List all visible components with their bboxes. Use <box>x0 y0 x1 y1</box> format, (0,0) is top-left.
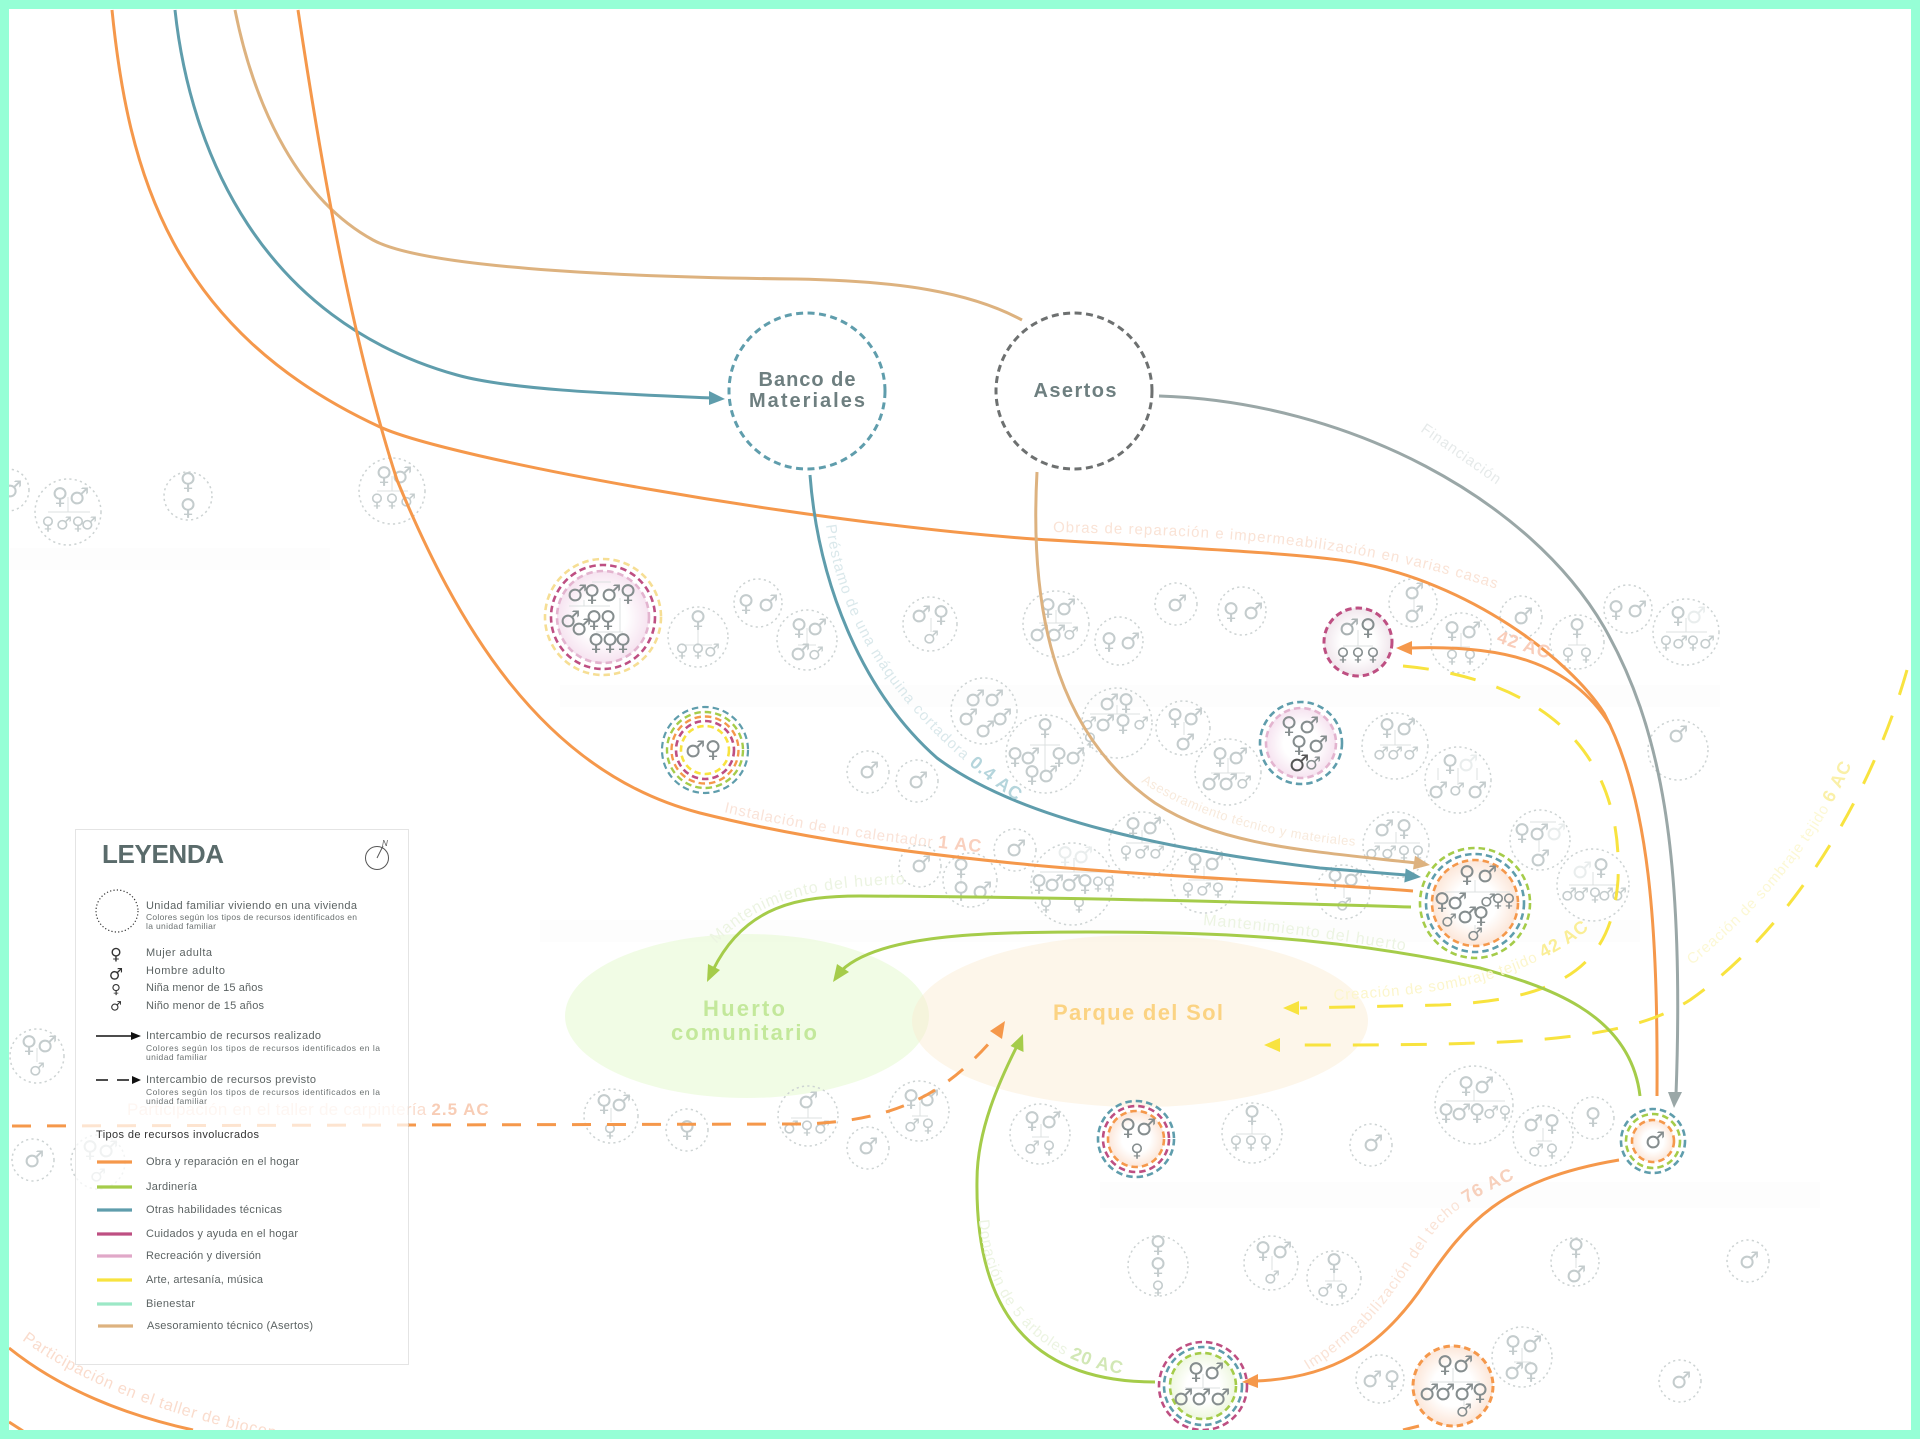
legend: realized exchange: unidad familiar <box>146 1052 207 1062</box>
legend: planned exchange: Intercambio de recursos previsto <box>146 1074 316 1086</box>
flow: taller de carpintería <box>12 1021 1005 1126</box>
label: Creación 42 AC: Creación de sombraje tejido 42 AC <box>1334 921 1587 1000</box>
flow: Mantenimiento del huerto 1 <box>707 896 1411 982</box>
family: ♀♂♂♀ <box>1031 871 1093 897</box>
legend: Asesoramiento: Asesoramiento técnico (Asertos) <box>147 1320 313 1332</box>
highlighted family: orange: ♂♂♂♀ <box>1419 1380 1488 1406</box>
highlighted family: multiple resources <box>662 707 748 793</box>
node: Asertos: Asertos <box>1034 380 1116 402</box>
family: ♂♀ <box>911 602 949 628</box>
family <box>1222 1102 1282 1163</box>
family <box>666 1109 708 1151</box>
family: ♂♀ <box>1099 690 1134 716</box>
family: ♂ <box>1449 780 1465 800</box>
label: Donación: Donación de 5 árboles 20 AC <box>979 1220 1122 1374</box>
highlighted family: pink and teal: ♂ <box>1305 754 1321 774</box>
family: ♀♂ <box>1101 629 1140 655</box>
family: ♀♀ <box>1091 874 1116 894</box>
highlighted family: orange <box>1413 1346 1493 1426</box>
family: ♀♀ <box>1445 646 1477 668</box>
highlighted family: pink and teal: ♀♂ <box>1281 713 1319 739</box>
legend: people <box>109 944 264 1014</box>
highlighted family: arts and care <box>545 559 661 675</box>
family <box>1500 596 1542 638</box>
family: ♂♀♂ <box>783 1118 830 1138</box>
family: ♂ <box>911 852 931 878</box>
family: ♂♂ <box>1201 770 1238 796</box>
family: ♀♂ <box>1444 618 1481 644</box>
family: ♀ <box>1442 751 1458 777</box>
family <box>164 469 212 521</box>
family: ♂♂♂ <box>1373 744 1419 764</box>
family: ♀♂ <box>1327 866 1363 892</box>
family: ♂♂♀♂♂ <box>1561 884 1627 906</box>
legend: people: ♂ <box>109 964 123 984</box>
family: ♂ <box>908 768 928 794</box>
label: Instalación: Instalación de un calentador 1 AC <box>725 802 981 852</box>
family: ♂ <box>29 1060 45 1080</box>
icon: compass <box>366 839 388 870</box>
label: Creación 6 AC: Creación de sombraje tejido 6 AC <box>1688 762 1850 963</box>
highlighted family: magenta: ♂ <box>1339 615 1359 641</box>
family <box>1557 849 1629 921</box>
family: ♂ <box>1404 602 1424 628</box>
family: ♀♂ <box>1024 762 1058 788</box>
legend: realized exchange <box>96 1030 380 1062</box>
family: ♂ <box>790 640 810 666</box>
highlighted family: teal magenta orange: ♀ <box>1130 1140 1144 1162</box>
family <box>1316 865 1370 919</box>
legend title: LEYENDA <box>102 839 224 869</box>
family: ♀ <box>603 1120 617 1142</box>
family: ♂ <box>1566 1262 1586 1288</box>
flow: Creación de sombraje tejido 6 AC <box>1264 670 1907 1052</box>
family <box>1356 1355 1404 1403</box>
family <box>1363 812 1429 878</box>
family: ♀♂ <box>82 1137 118 1163</box>
family: ♀♂♀♂ <box>1659 632 1715 654</box>
family: ♂ <box>1404 579 1424 605</box>
family: ♀♂ <box>1125 814 1162 840</box>
family: ♂ <box>1530 846 1550 872</box>
legend: planned exchange <box>96 1074 380 1106</box>
highlighted family: arts and care: ♀♀♀ <box>588 630 631 656</box>
family <box>1362 713 1428 779</box>
highlighted family: orange teal green <box>1420 848 1530 958</box>
family: ♂ <box>90 1166 106 1186</box>
family: ♀♀♂ <box>675 640 720 662</box>
area: Parque del Sol <box>912 935 1368 1107</box>
family <box>1171 847 1237 913</box>
label: Huerto comunitario: Huerto <box>703 996 785 1021</box>
family <box>71 1135 125 1189</box>
family <box>1350 1124 1392 1166</box>
label: Mantenimiento 1: Mantenimiento del huerto <box>710 874 904 936</box>
family <box>1156 701 1210 756</box>
family <box>1648 720 1708 780</box>
family: ♀ <box>1670 603 1686 629</box>
family: ♀♂ <box>596 1091 631 1117</box>
family <box>1095 617 1143 665</box>
family <box>1307 1250 1361 1305</box>
family: ♀ <box>690 607 706 633</box>
family: ♂♂ <box>965 686 1004 712</box>
family: ♂ <box>1081 714 1097 734</box>
label: Asesoramiento técnico: Asesoramiento técnico y materiales <box>1141 776 1355 846</box>
family: ♀♂ <box>1024 1108 1061 1134</box>
flow: Asesoramiento from top <box>235 10 1022 320</box>
highlighted family: blue green orange: ♂ <box>1645 1128 1665 1154</box>
family <box>1195 739 1261 805</box>
label: Parque del Sol: Parque del Sol <box>1053 1000 1223 1025</box>
legend: Bienestar <box>97 1298 195 1310</box>
family: ♀ <box>1150 1254 1166 1280</box>
family: ♂ <box>1264 1268 1280 1288</box>
family: ♀♂♀♂ <box>1007 744 1085 770</box>
family: ♀♂ <box>1187 850 1224 876</box>
family: ♂ <box>1686 603 1706 629</box>
family: ♂ <box>1336 894 1352 916</box>
family <box>1492 1327 1552 1387</box>
family <box>1435 1066 1513 1144</box>
family: ♀♂♀ <box>1181 880 1225 900</box>
highlighted family: magenta: ♀♀♀ <box>1336 644 1380 666</box>
family: ♂ <box>1739 1248 1759 1274</box>
family: ♀ <box>679 1117 695 1143</box>
family: ♂♀ <box>1374 816 1412 842</box>
family <box>1218 587 1266 635</box>
family: ♂ <box>1236 772 1252 794</box>
highlighted family: teal magenta orange <box>1098 1101 1174 1177</box>
highlighted family: orange: ♀♂ <box>1437 1352 1473 1378</box>
family <box>1244 1236 1298 1290</box>
family <box>1006 715 1085 793</box>
highlighted family: orange teal green: ♂♀♀ <box>1480 890 1516 912</box>
family: ♀♂ <box>738 591 778 617</box>
legend: people: Niño menor de 15 años <box>146 1000 264 1012</box>
node: Banco de Materiales <box>729 313 885 469</box>
family <box>1389 579 1437 628</box>
flow: Creación de sombraje tejido 42 AC <box>1283 666 1618 1015</box>
legend: realized exchange: Colores según los tipos de recursos identificados en la <box>146 1043 380 1053</box>
label: Impermeabilización: Impermeabilización del techo 76 AC <box>1304 1169 1513 1370</box>
highlighted family: blue green orange <box>1621 1109 1685 1173</box>
family <box>1155 583 1197 625</box>
family: ♂♀ <box>1504 1359 1539 1385</box>
family: ♂♀ <box>904 1116 935 1136</box>
family: ♂ <box>1006 836 1026 862</box>
family: ♀♀ <box>1561 644 1593 666</box>
flow: Obras de reparación <box>112 10 1657 1096</box>
family: ♂ <box>1175 730 1195 756</box>
family <box>1010 1104 1070 1164</box>
family <box>889 1081 949 1141</box>
family <box>1510 810 1570 872</box>
legend: household: Unidad familiar viviendo en una vivienda <box>146 900 358 912</box>
family: ♀ <box>1151 1278 1165 1298</box>
family <box>896 760 938 802</box>
highlighted family: magenta: ♀ <box>1360 615 1376 641</box>
family <box>1425 747 1491 813</box>
highlighted family: orange teal green: ♀♂ <box>1459 862 1497 888</box>
panel: legend <box>76 830 408 1364</box>
family: ♀♀♂ <box>370 490 416 512</box>
family <box>1031 843 1116 925</box>
family <box>899 845 941 887</box>
family: ♂ <box>1572 858 1592 884</box>
family <box>1109 812 1175 878</box>
highlighted family: pink and teal: ♂ <box>1289 751 1309 777</box>
family: ♂ <box>1363 1131 1383 1157</box>
highlighted family: magenta blue green: ♂♂♂ <box>1173 1385 1230 1411</box>
family: ♀ <box>1244 1102 1260 1128</box>
highlighted family: teal magenta orange: ♀♂ <box>1120 1115 1156 1141</box>
legend: Arte: Arte, artesanía, música <box>146 1274 264 1286</box>
legend: household: Colores según los tipos de recursos identificados en <box>146 912 357 922</box>
flow: Donación de 5 árboles <box>977 1034 1155 1382</box>
label: carpintería: Participación en el taller de carpintería 2.5 AC <box>127 1100 490 1119</box>
family <box>10 1029 64 1083</box>
legend: Recreación: Recreación y diversión <box>146 1250 261 1262</box>
family: ♂ <box>1133 714 1149 734</box>
family: ♂ <box>1513 604 1533 630</box>
family <box>943 853 997 907</box>
family: ♀♂♀♂ <box>41 514 97 534</box>
legend: people: ♀ <box>110 944 122 964</box>
label: 42 AC: 42 AC <box>1495 627 1554 663</box>
family: ♂ <box>1668 722 1688 748</box>
family <box>1653 599 1719 665</box>
family <box>359 458 425 524</box>
family <box>903 597 957 651</box>
legend: people: ♀ <box>111 982 121 998</box>
family: ♀♂ <box>376 463 412 489</box>
family <box>1431 613 1491 673</box>
family: ♂ <box>1467 778 1487 804</box>
family: ♂♀ <box>1523 1111 1560 1137</box>
legend: people: Niña menor de 15 años <box>146 982 264 994</box>
family: ♀♂ <box>1040 595 1076 621</box>
family <box>584 1089 638 1143</box>
highlighted family: orange teal green: ♀♂ <box>1434 889 1467 915</box>
family <box>0 469 29 511</box>
family <box>1551 1235 1599 1288</box>
family: ♀♀♀ <box>1229 1132 1273 1154</box>
flow: Préstamo de máquina cortadora <box>810 475 1421 882</box>
flow: Asesoramiento técnico <box>1036 472 1430 870</box>
legend: Obra: Obra y reparación en el hogar <box>146 1156 299 1168</box>
legend: resource types heading: Tipos de recursos involucrados <box>96 1129 260 1141</box>
flow: to magenta family 42 AC <box>1396 641 1610 725</box>
node: Banco de Materiales: Materiales <box>749 390 865 412</box>
family <box>1550 615 1604 669</box>
family: ♀ <box>1150 1232 1166 1258</box>
family: ♀♂ <box>1255 1238 1292 1264</box>
family: ♀♂ <box>1057 843 1093 869</box>
family: ♂ <box>858 1134 878 1160</box>
flow: Instalación de un calentador <box>298 10 1413 891</box>
legend: household <box>96 890 358 932</box>
label: Obras de reparación: Obras de reparación e impermeabilización en varias casas <box>1054 521 1498 588</box>
family: ♀♂ <box>1608 597 1647 623</box>
area: Huerto comunitario <box>565 934 929 1098</box>
family: ♀♂♂ <box>1119 842 1165 864</box>
family: ♀ <box>1593 855 1609 881</box>
family <box>847 751 889 793</box>
flow fragment bottom <box>1403 1426 1419 1430</box>
family: ♀ <box>1569 615 1585 641</box>
family <box>1023 591 1089 657</box>
legend: Cuidados: Cuidados y ayuda en el hogar <box>146 1228 298 1240</box>
family: ♂♀ <box>1362 1367 1400 1393</box>
highlighted family: magenta blue green: ♀♂ <box>1188 1359 1224 1385</box>
family <box>1727 1240 1769 1282</box>
family <box>1604 585 1652 633</box>
family: ♂♀ <box>1095 711 1131 737</box>
legend: Bienestar: Bienestar <box>146 1298 195 1310</box>
flow: Financiación <box>1159 396 1682 1108</box>
family <box>734 579 782 627</box>
highlighted family: pink and teal: ♀♂ <box>1291 732 1328 758</box>
family: ♀♂ <box>1167 705 1203 731</box>
family: ♂ <box>1167 591 1187 617</box>
family <box>847 1127 889 1169</box>
highlighted family: pink and teal <box>1260 702 1342 784</box>
family: ♀ <box>1083 730 1097 750</box>
family: ♀♂ <box>1514 820 1549 846</box>
label: Préstamo: Préstamo de una máquina cortadora 0.4 AC <box>826 524 1022 799</box>
family: ♂ <box>859 758 879 784</box>
family: ♂ <box>798 1088 818 1114</box>
family: ♀ <box>180 469 196 495</box>
family: ♀♂ <box>52 484 89 510</box>
legend: realized exchange: Intercambio de recursos realizado <box>146 1030 321 1042</box>
node: Banco de Materiales: Banco de <box>758 369 856 391</box>
legend: people: ♂ <box>110 1000 122 1014</box>
flow fragment bottom left <box>9 1422 23 1431</box>
family: ♀♂ <box>1212 744 1248 770</box>
legend: people: Hombre adulto <box>146 965 225 977</box>
family: ♂ <box>1671 1368 1691 1394</box>
family <box>668 607 728 667</box>
family: ♀ <box>1568 1235 1584 1261</box>
family: ♂ <box>975 717 995 743</box>
family <box>1128 1232 1188 1298</box>
family: ♀♂ <box>791 615 827 641</box>
label: Huerto comunitario <box>671 996 817 1045</box>
highlighted family: arts and care: ♂♀♂♀ <box>567 581 636 607</box>
family: ♂ <box>923 628 939 648</box>
legend: people: Mujer adulta <box>146 947 213 959</box>
highlighted family: arts and care: ♂ <box>571 615 591 641</box>
family <box>778 1086 838 1146</box>
family: ♀♂♀ <box>1438 1100 1485 1126</box>
family: ♂ <box>1063 624 1079 644</box>
family: ♀♀ <box>1039 894 1086 916</box>
family: ♂♀ <box>1528 1140 1559 1162</box>
family <box>12 1139 54 1181</box>
family <box>994 829 1036 871</box>
family: ♀ <box>1326 1250 1342 1276</box>
family: ♂♀ <box>1483 1102 1512 1124</box>
family: ♂ <box>24 1147 44 1173</box>
family: ♀ <box>953 855 969 881</box>
legend: planned exchange: Colores según los tipos de recursos identificados en la <box>146 1087 380 1097</box>
family <box>1513 1106 1573 1166</box>
family: ♀♂ <box>953 878 992 904</box>
legend: household: la unidad familiar <box>146 921 216 931</box>
family: ♂ <box>1546 820 1566 846</box>
family: ♂♂ <box>958 705 1012 731</box>
family <box>777 610 837 670</box>
family: ♀♂ <box>1505 1332 1542 1358</box>
highlighted family: multiple resources: ♂♀ <box>685 737 721 763</box>
family: ♀♂ <box>1458 1073 1494 1099</box>
flow: Mantenimiento del huerto 2 <box>833 932 1640 1096</box>
family: ♂♀ <box>1317 1280 1349 1302</box>
family: ♂♂♀♀ <box>1365 842 1425 864</box>
family: ♀♂ <box>903 1086 939 1112</box>
label: Financiación: Financiación <box>1418 420 1505 488</box>
label: Huerto comunitario: comunitario <box>671 1020 817 1045</box>
family: ♀♂ <box>21 1032 57 1058</box>
flow: Impermeabilización del techo <box>1242 1160 1619 1388</box>
flow: taller de bioconstrucción <box>9 1348 193 1430</box>
flow: to Banco de Materiales <box>175 10 725 405</box>
family: ♂♀ <box>1024 1138 1056 1158</box>
highlighted family: orange teal green: ♂ <box>1441 910 1457 932</box>
family: ♀ <box>1037 715 1053 741</box>
icon: compass: N <box>382 839 388 848</box>
family: ♀ <box>180 495 196 521</box>
family <box>1572 1097 1614 1139</box>
family: ♀♂ <box>1223 599 1263 625</box>
family: ♂ <box>2 477 22 503</box>
family <box>1659 1360 1701 1402</box>
legend: Jardinería <box>97 1181 198 1193</box>
family: ♂ <box>1458 751 1478 777</box>
highlighted family: arts and care: ♂♀♀ <box>560 607 616 633</box>
family <box>951 678 1017 744</box>
highlighted family: orange: ♂ <box>1456 1400 1472 1422</box>
label: Mantenimiento 2: Mantenimiento del huerto <box>1204 914 1405 950</box>
family: ♀ <box>1585 1104 1601 1130</box>
legend: Jardinería: Jardinería <box>146 1181 198 1193</box>
legend: Otras: Otras habilidades técnicas <box>146 1204 282 1216</box>
highlighted family: magenta <box>1324 608 1392 676</box>
family: ♂ <box>1428 778 1448 804</box>
highlighted family: orange teal green: ♂ <box>1467 924 1483 946</box>
highlighted family: orange teal green: ♂♀ <box>1457 903 1489 929</box>
highlighted family: magenta blue green <box>1159 1342 1247 1430</box>
legend: planned exchange: unidad familiar <box>146 1096 207 1106</box>
family <box>1081 688 1152 758</box>
family <box>35 479 101 545</box>
family: ♂ <box>808 644 824 664</box>
family: ♀♂ <box>1379 715 1416 741</box>
node: Asertos <box>996 313 1152 469</box>
family: ♂♂ <box>1029 621 1066 647</box>
